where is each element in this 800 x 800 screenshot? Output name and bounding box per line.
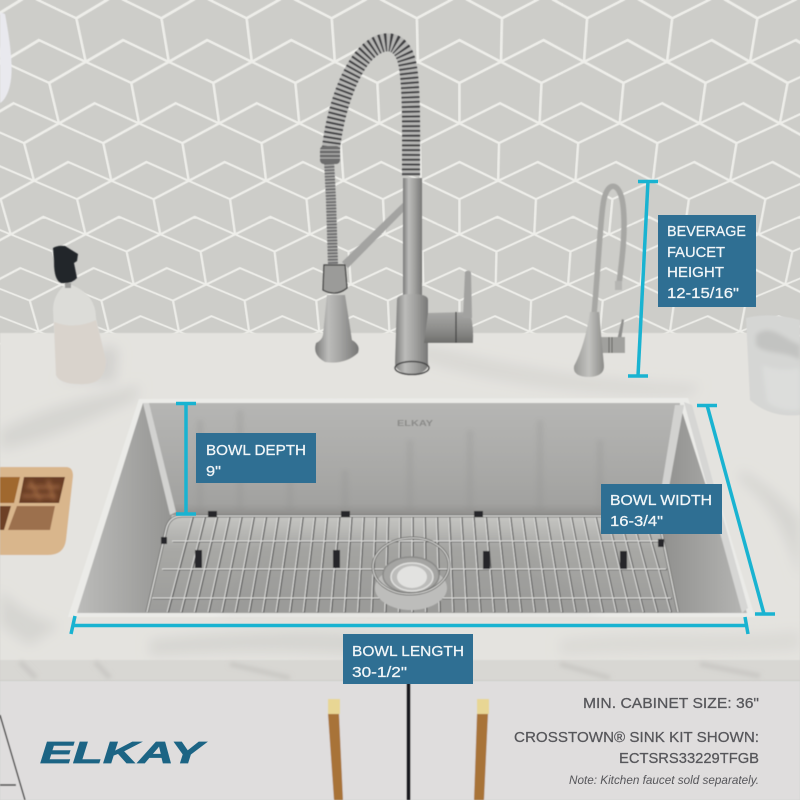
- spout tip: [615, 281, 622, 290]
- drain basket: [372, 536, 450, 610]
- rack frame: [147, 516, 678, 612]
- label: bowl width: [601, 484, 722, 534]
- basket rim: [372, 536, 450, 596]
- dimension: beverage faucet height: [628, 181, 658, 376]
- right door handle: [474, 699, 489, 800]
- basket bottom bowl: [375, 566, 447, 610]
- beverage faucet: [574, 186, 625, 377]
- soap bottle shadow: [60, 345, 118, 382]
- label: bowl width: BOWL WIDTH: [610, 492, 712, 509]
- logo: Elkay: ELKAY: [40, 735, 208, 770]
- countertop front edge: [0, 660, 800, 680]
- pump head: [53, 246, 78, 283]
- product notes: CROSSTOWN® SINK KIT SHOWN:: [514, 729, 759, 746]
- top right compartment: [19, 477, 65, 503]
- label: beverage faucet height: 12-15/16": [667, 285, 739, 302]
- label: bowl width: 16-3/4": [610, 513, 663, 530]
- soap bottle: [53, 246, 118, 384]
- product notes: MIN. CABINET SIZE: 36": [583, 695, 759, 712]
- spray head collar: [323, 265, 347, 293]
- rack wires shadow: [153, 516, 672, 612]
- right rim bevel: [684, 402, 748, 613]
- product notes: ECTSRS33229TFGB: [619, 750, 759, 767]
- engraved logo: ELKAY: [397, 419, 434, 428]
- sink floor: [146, 515, 677, 613]
- right corner highlight: [657, 405, 684, 515]
- glass water lower: [762, 365, 800, 410]
- rack frame highlight: [147, 516, 678, 612]
- beverage handle: [598, 337, 625, 353]
- product notes: Note: Kitchen faucet sold separately.: [569, 773, 759, 787]
- lever: [463, 270, 472, 318]
- support arm: [342, 198, 412, 268]
- dimension: bowl width: [697, 405, 775, 614]
- pump neck: [65, 283, 71, 288]
- left corner highlight: [143, 403, 176, 515]
- bottle liquid: [54, 320, 106, 384]
- label: bowl depth: 9": [206, 463, 221, 480]
- marble veining: [0, 345, 800, 660]
- beverage lever: [617, 319, 624, 341]
- base ring: [395, 362, 429, 374]
- tiled wall: rhombus backsplash: [0, 0, 800, 344]
- lower left compartment: [0, 506, 11, 530]
- kitchen faucet: [315, 42, 473, 375]
- rack wires highlight: [152, 516, 671, 612]
- paper towel at left edge: [0, 12, 12, 103]
- glass body: [746, 315, 800, 415]
- dimension: bowl depth: [176, 403, 196, 514]
- top left compartment: [0, 477, 20, 503]
- left cabinet edge lines: [0, 715, 25, 800]
- nut tray: [0, 467, 73, 555]
- sink basin: [77, 402, 748, 613]
- lower right compartment: [8, 506, 55, 530]
- beverage spout arch: [594, 186, 624, 315]
- rack: [147, 511, 678, 612]
- faucet column: [403, 178, 422, 298]
- sink back wall: [143, 403, 680, 515]
- label: beverage faucet height: FAUCET: [667, 244, 725, 261]
- tray body: [0, 467, 73, 555]
- label: beverage faucet height: [658, 215, 756, 307]
- sink bright rim: [68, 398, 755, 617]
- cabinet door gap: [406, 681, 410, 800]
- label: bowl depth: BOWL DEPTH: [206, 442, 306, 459]
- faucet base: [395, 294, 428, 375]
- label: beverage faucet height: BEVERAGE: [667, 223, 746, 240]
- spring lower wide ring: [320, 146, 340, 164]
- label: beverage faucet height: HEIGHT: [667, 264, 724, 281]
- spring hose lower: [329, 160, 333, 265]
- basket rings: [383, 557, 439, 593]
- cabinet doors: [0, 681, 800, 800]
- label: bowl length: 30-1/2": [352, 664, 407, 681]
- ice and water texture: [756, 330, 800, 360]
- drain centre: [397, 566, 427, 588]
- left basin wall: [77, 403, 172, 613]
- sink back wall streaks: [200, 410, 600, 512]
- bottle shoulder: [53, 285, 106, 384]
- beverage base: [574, 312, 604, 377]
- rack clips: [161, 511, 664, 569]
- dimension: bowl length: [71, 616, 748, 634]
- label: bowl length: BOWL LENGTH: [352, 643, 464, 660]
- nuts: [22, 480, 60, 500]
- left door handle: [328, 699, 343, 800]
- label: bowl length: [343, 634, 473, 684]
- handle seam: [455, 312, 457, 343]
- side handle body: [424, 312, 473, 343]
- floor shadow bands: [220, 540, 600, 612]
- edge veining: [20, 662, 760, 678]
- product notes: [514, 695, 759, 787]
- spray head cone: [315, 295, 359, 363]
- water glass: [746, 315, 800, 415]
- spring coil arch: [330, 42, 411, 176]
- label: bowl depth: [196, 433, 316, 483]
- right basin wall: [660, 405, 747, 613]
- countertop: [0, 333, 800, 663]
